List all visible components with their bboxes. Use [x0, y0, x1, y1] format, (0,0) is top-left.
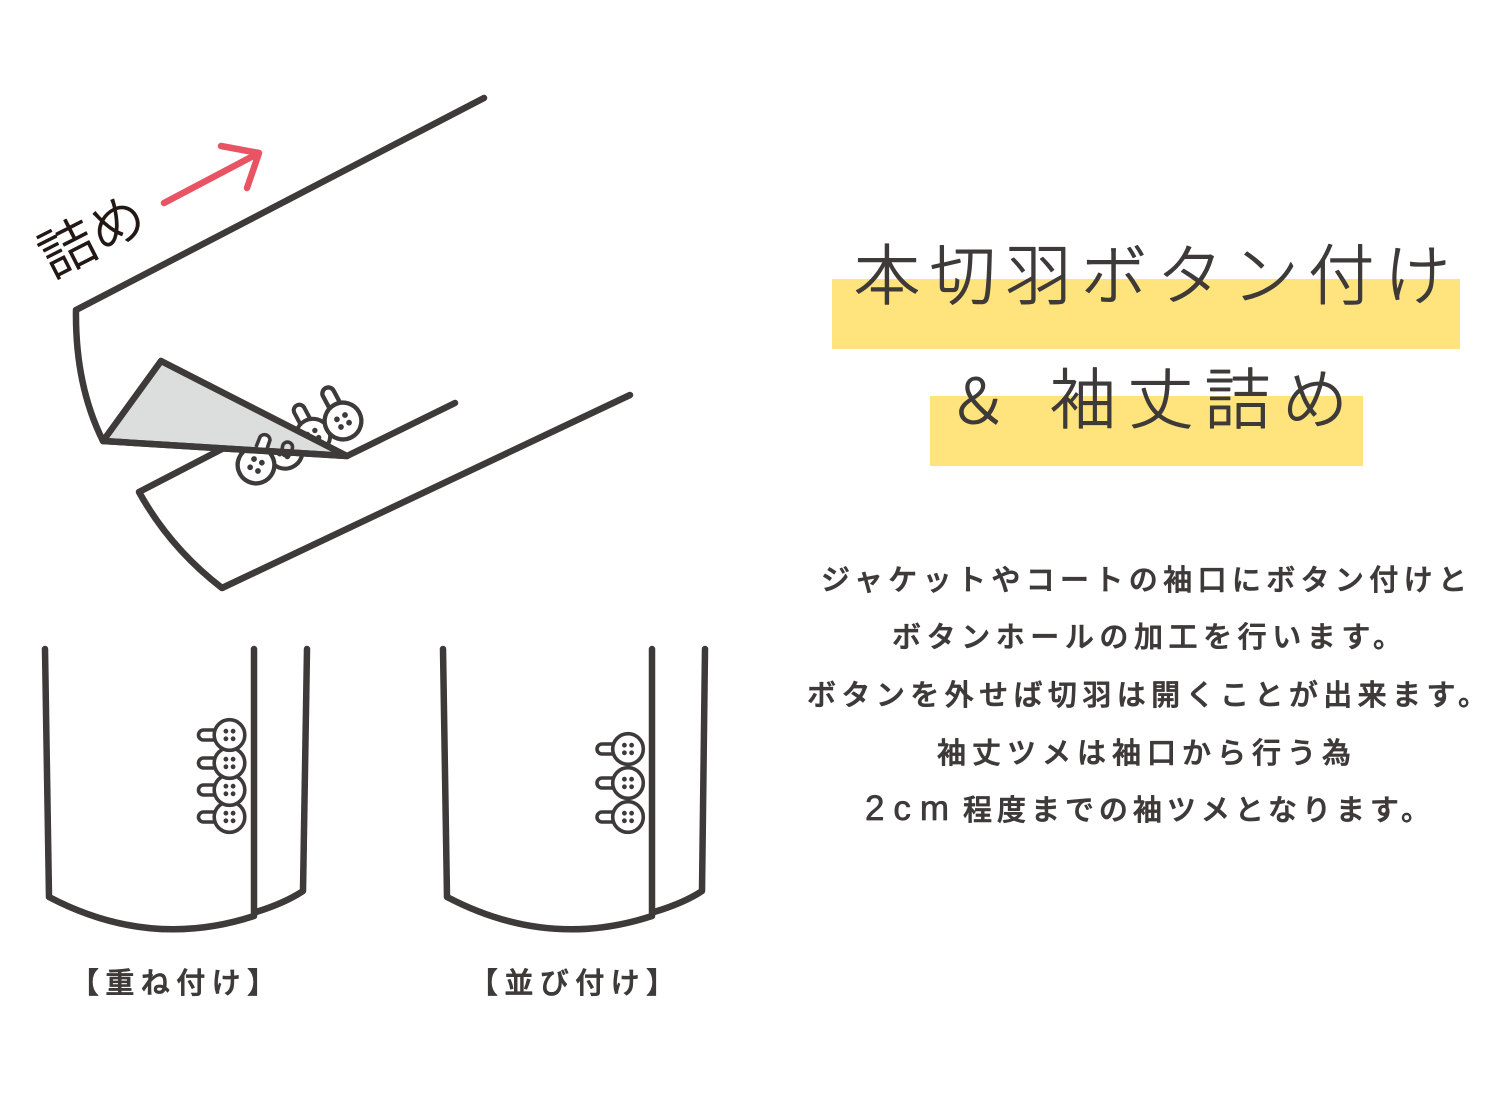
description text: ボタンを外せば切羽は開くことが出来ます。 — [807, 679, 1487, 712]
caption: overlapped: 【重ね付け】 — [70, 967, 276, 1000]
label: 詰め: 詰め — [29, 184, 155, 289]
flap bottom edge — [103, 403, 455, 456]
title line 2: ＆ — [947, 368, 1009, 437]
caption: side by side: 【並び付け】 — [469, 967, 675, 1000]
buttons: side by side — [597, 734, 643, 832]
description text: 2cm — [865, 789, 949, 828]
sleeve upper outline — [76, 98, 484, 441]
title highlight 1 — [832, 279, 1460, 349]
diagram: overlapped buttons cuff — [45, 649, 307, 929]
lower sleeve piece — [139, 395, 630, 588]
description text: ボタンホールの加工を行います。 — [892, 621, 1402, 654]
buttons: overlapped — [198, 720, 245, 832]
description text: 袖丈ツメは袖口から行う為 — [937, 737, 1351, 770]
description text: 程度までの袖ツメとなります。 — [963, 794, 1430, 827]
title highlight 2 — [930, 396, 1363, 466]
folded flap — [103, 361, 347, 456]
title line 1: 本切羽ボタン付け — [854, 239, 1450, 313]
description text: ジャケットやコートの袖口にボタン付けと — [821, 564, 1467, 597]
button tails over flap — [256, 435, 293, 457]
arrow: shortening direction — [164, 146, 259, 203]
buttons behind flap — [232, 380, 368, 489]
diagram: sleeve with cut-off cuff — [76, 98, 630, 588]
description text — [807, 564, 1487, 828]
diagram: side-by-side buttons cuff — [443, 649, 705, 929]
title line 2: 袖丈詰め — [1050, 363, 1348, 437]
